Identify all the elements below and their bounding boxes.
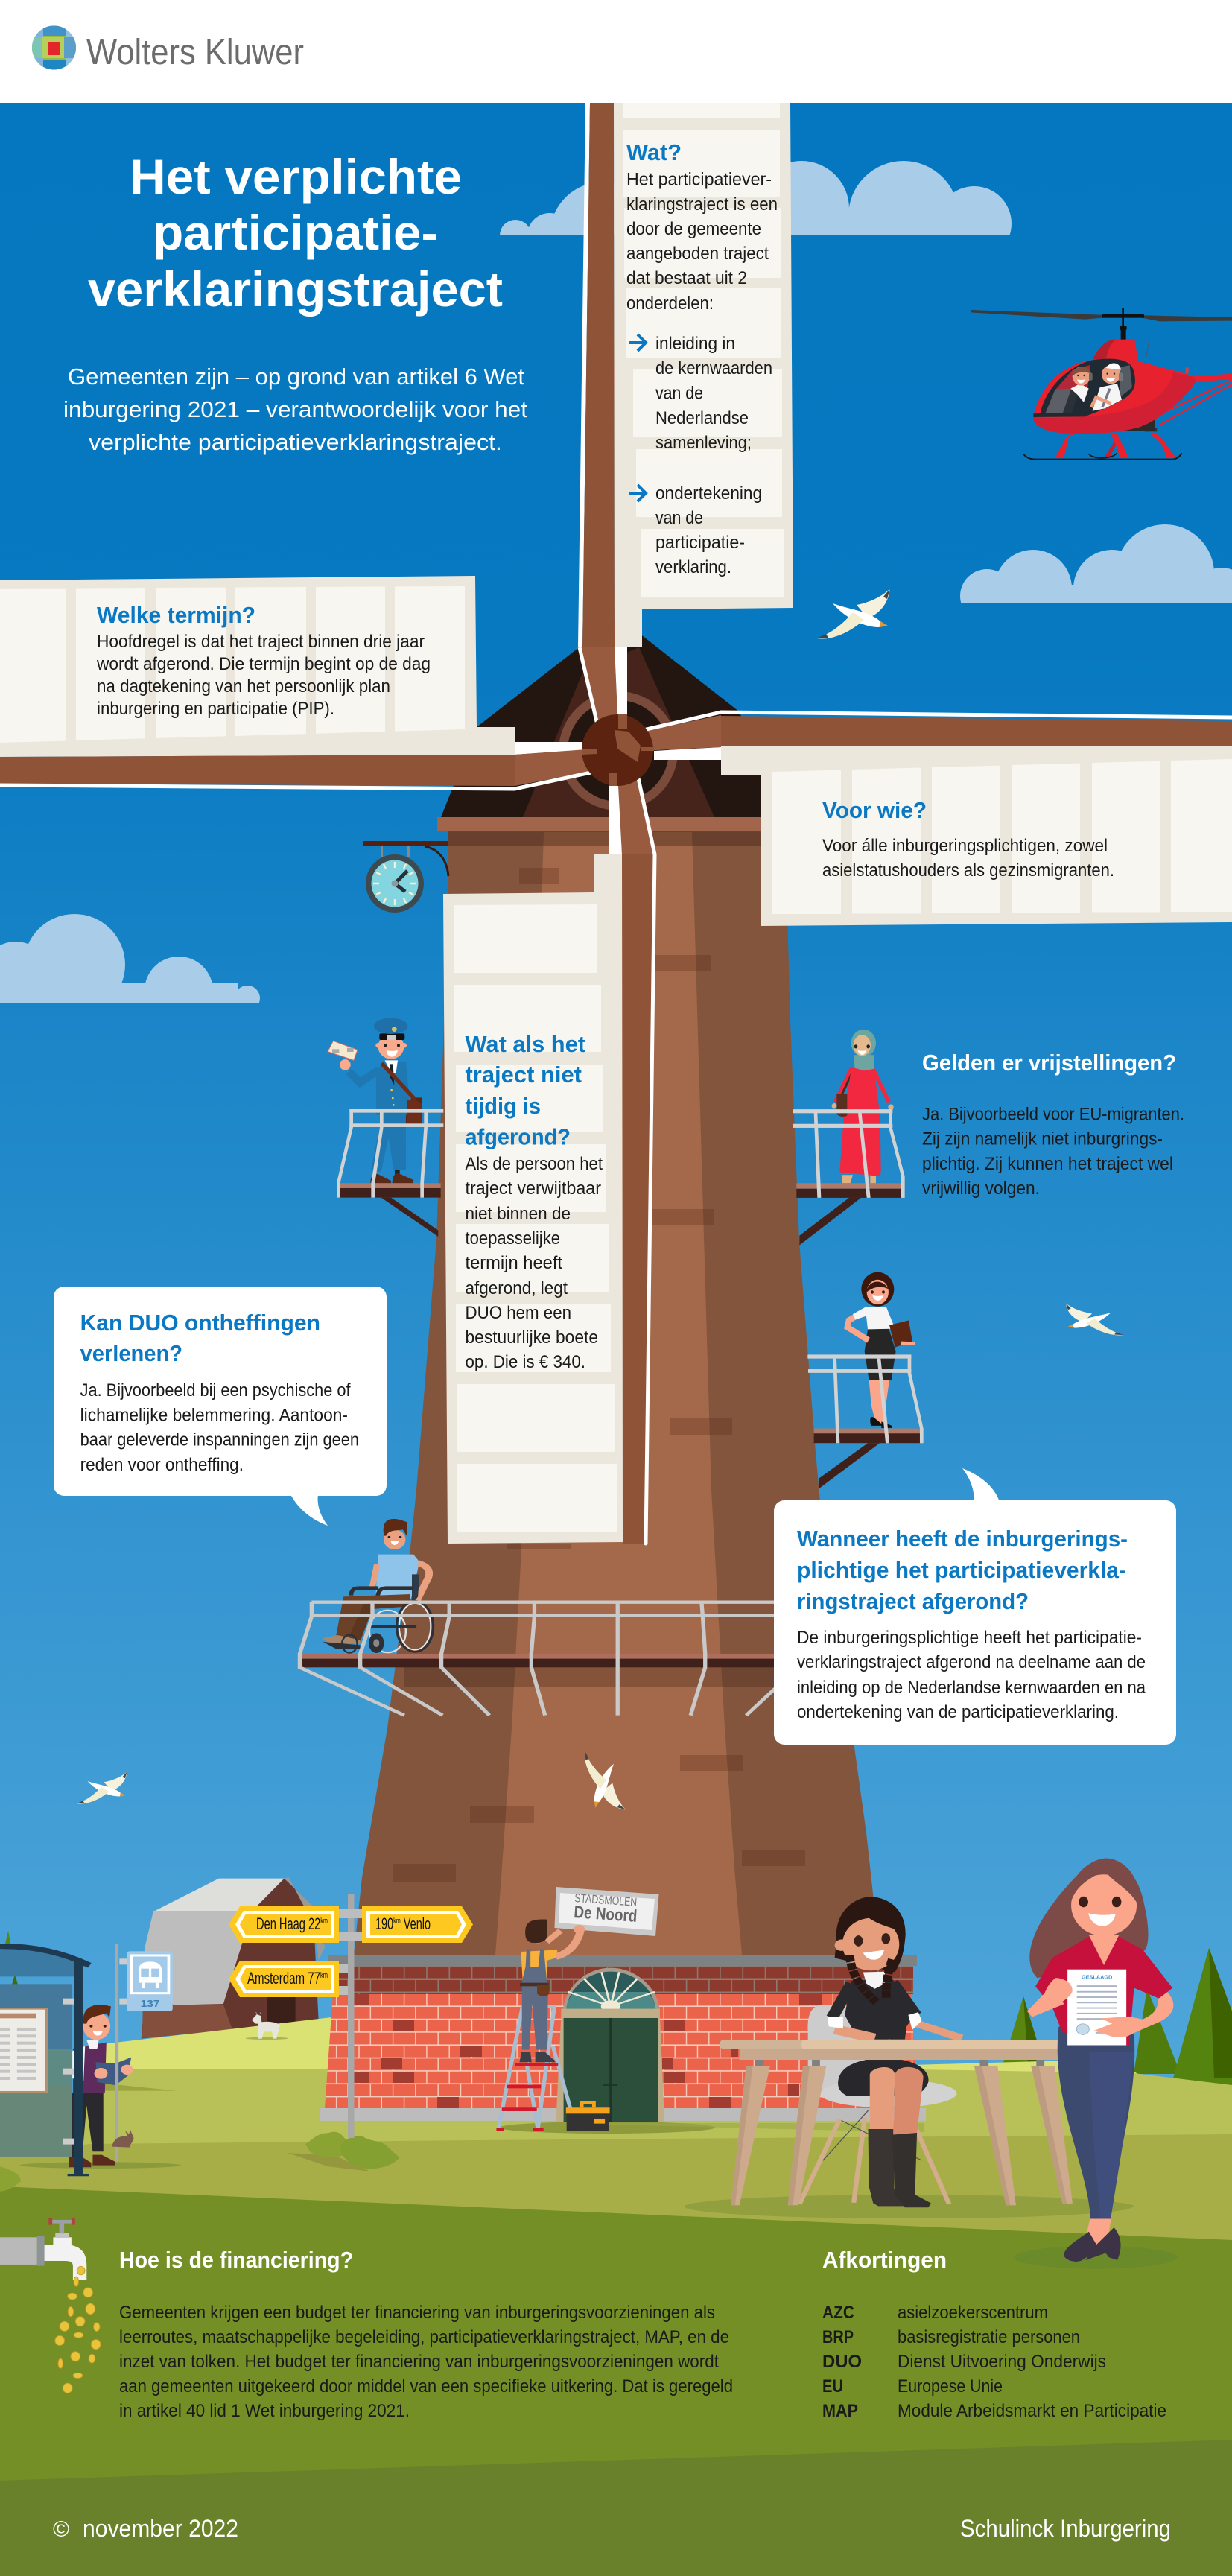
panel: Voor wie?: Voor wie?	[822, 797, 927, 823]
panel: Wat?: onderdelen:	[626, 294, 714, 314]
panel: Afkortingen: Afkortingen	[822, 2247, 947, 2273]
balcony with postman	[328, 1018, 443, 1237]
panel: Wat als het traject niet tijdig is afgerond?: DUO hem een	[465, 1303, 571, 1323]
callout: Wanneer heeft de inburgeringsplichtige: De inburgeringsplichtige heeft het participatie-	[797, 1628, 1142, 1648]
panel: Wat?: door de gemeente	[626, 219, 761, 239]
panel: Wat?: dat bestaat uit 2	[626, 268, 747, 288]
panel: Wat als het traject niet tijdig is afgerond?	[465, 1031, 603, 1372]
callout: Wanneer heeft de inburgeringsplichtige: ondertekening van de participatieverklaring.	[797, 1702, 1119, 1722]
panel: Wat?: Wat?	[626, 139, 682, 165]
panel: Afkortingen: EU	[822, 2376, 843, 2396]
panel: Wat als het traject niet tijdig is afgerond?: traject verwijtbaar	[465, 1178, 601, 1199]
panel: Wat?: ondertekening	[655, 483, 762, 504]
signpost: Den Haag, Venlo, Amsterdam: 190	[375, 1914, 403, 1933]
panel: Voor wie?: asielstatushouders als gezinsmigranten.	[822, 860, 1114, 881]
panel: Wat?: de kernwaarden	[655, 358, 772, 378]
footer: date: ©	[53, 2517, 69, 2542]
callout: Wanneer heeft de inburgeringsplichtige: inleiding op de Nederlandse kernwaarden en na	[797, 1678, 1146, 1698]
ground: hill and fields	[0, 2017, 1232, 2576]
windmill hub	[582, 714, 654, 786]
pine tree left	[0, 1931, 30, 2026]
bush	[288, 2132, 400, 2171]
callout: Wanneer heeft de inburgeringsplichtige: plichtige het participatieverkla-	[797, 1557, 1126, 1583]
panel: Hoe is de financiering?: inzet van tolken. Het budget ter financiering van inburgeringsvoorzieningen wordt	[119, 2352, 719, 2372]
panel: Wat als het traject niet tijdig is afgerond?: niet binnen de	[465, 1204, 571, 1224]
intro text	[63, 364, 527, 455]
intro text: inburgering 2021 – verantwoordelijk voor het	[63, 396, 527, 422]
callout: Kan DUO ontheffingen verlenen?: lichamelijke belemmering. Aantoon-	[80, 1406, 348, 1426]
panel: Wat als het traject niet tijdig is afgerond?: toepasselijke	[465, 1228, 560, 1249]
panel: Hoe is de financiering?: in artikel 40 lid 1 Wet inburgering 2021.	[119, 2401, 410, 2421]
sign: Stadsmolen De Noord	[554, 1887, 658, 1936]
balcony with businesswoman	[807, 1272, 924, 1488]
balcony with woman in red dress	[793, 1030, 905, 1246]
faucet	[0, 2218, 86, 2280]
callout: Wanneer heeft de inburgeringsplichtige	[774, 1468, 1176, 1745]
signpost: Den Haag, Venlo, Amsterdam: km	[320, 1971, 328, 1980]
panel: Wat?	[626, 139, 778, 577]
panel: Wat als het traject niet tijdig is afgerond?: termijn heeft	[465, 1253, 562, 1273]
sign: Stadsmolen De Noord: De Noord	[574, 1902, 638, 1926]
wide balcony with wheelchair user	[299, 1519, 784, 1716]
panel: Afkortingen: basisregistratie personen	[898, 2327, 1080, 2347]
cloud right	[960, 524, 1232, 603]
signpost: Den Haag, Venlo, Amsterdam	[229, 1894, 473, 2138]
callout: Kan DUO ontheffingen verlenen?: Ja. Bijvoorbeeld bij een psychische of	[80, 1380, 351, 1400]
pine trees right	[1003, 1948, 1232, 2086]
panel: Wat?: van de	[655, 508, 703, 528]
panel: Welke termijn?: wordt afgerond. Die termijn begint op de dag	[96, 654, 431, 674]
panel: Afkortingen: AZC	[822, 2303, 854, 2323]
table and chair with seated woman	[685, 1897, 1132, 2218]
title: participatie-	[153, 205, 438, 260]
signpost: Den Haag, Venlo, Amsterdam: Den Haag 22	[256, 1914, 353, 1933]
callout: Kan DUO ontheffingen verlenen?: reden voor ontheffing.	[80, 1455, 244, 1475]
bus stop sign: 137	[141, 1998, 160, 2009]
callout: Kan DUO ontheffingen verlenen?	[54, 1287, 387, 1526]
standing woman with certificate	[1014, 1858, 1178, 2269]
panel: Wat als het traject niet tijdig is afgerond?: afgerond, legt	[465, 1278, 568, 1298]
panel: Wat?: participatie-	[655, 533, 745, 553]
barn	[142, 1877, 326, 2039]
callout: Wanneer heeft de inburgeringsplichtige: Wanneer heeft de inburgerings-	[797, 1526, 1128, 1552]
helicopter	[971, 308, 1232, 460]
panel: Wat?: verklaring.	[655, 557, 731, 577]
windmill tower	[354, 817, 880, 1955]
panel: Welke termijn?: Hoofdregel is dat het traject binnen drie jaar	[97, 632, 425, 652]
panel: Wat als het traject niet tijdig is afgerond?: Wat als het	[465, 1031, 585, 1057]
goat	[246, 2012, 288, 2040]
panel: Afkortingen: Module Arbeidsmarkt en Participatie	[898, 2401, 1166, 2421]
worker on ladder	[496, 1919, 585, 2131]
bus stop shelter and man reading	[0, 1947, 181, 2192]
callout: Kan DUO ontheffingen verlenen?: Kan DUO ontheffingen	[80, 1310, 320, 1336]
door with arched window	[556, 1968, 664, 2122]
seagull 1	[817, 589, 890, 639]
panel: Voor wie?	[822, 797, 1114, 881]
cloud top	[500, 161, 1012, 235]
title: verklaringstraject	[88, 261, 503, 317]
signpost: Den Haag, Venlo, Amsterdam: km	[393, 1917, 401, 1926]
panel: Hoe is de financiering?: Hoe is de financiering?	[119, 2247, 353, 2273]
panel: Wat?: samenleving;	[655, 433, 752, 453]
cloud left	[0, 914, 260, 1003]
title	[88, 149, 503, 317]
panel: Gelden er vrijstellingen?: Zij zijn namelijk niet inburgrings-	[922, 1129, 1163, 1149]
panel: Gelden er vrijstellingen?: vrijwillig volgen.	[922, 1178, 1040, 1199]
panel: Wat als het traject niet tijdig is afgerond?: tijdig is	[465, 1093, 541, 1119]
callout: Kan DUO ontheffingen verlenen?: baar geleverde inspanningen zijn geen	[80, 1430, 359, 1450]
panel: Wat?: aangeboden traject	[626, 244, 769, 264]
panel: Afkortingen: asielzoekerscentrum	[898, 2303, 1048, 2323]
panel: Hoe is de financiering?	[119, 2247, 733, 2421]
panel: Afkortingen: Europese Unie	[898, 2376, 1003, 2396]
window sail: left	[0, 576, 605, 789]
seagull 2	[1066, 1303, 1123, 1335]
header bar	[0, 0, 1232, 103]
panel: Gelden er vrijstellingen?	[922, 1050, 1184, 1199]
panel: Wat?: klaringstraject is een	[626, 194, 778, 215]
standing woman with certificate: GESLAAGD	[1082, 1973, 1112, 1981]
panel: Welke termijn?	[96, 602, 431, 719]
panel: Wat als het traject niet tijdig is afgerond?: afgerond?	[465, 1123, 571, 1150]
panel: Wat?: Nederlandse	[655, 408, 749, 428]
panel: Afkortingen: DUO	[822, 2352, 862, 2372]
callout: Wanneer heeft de inburgeringsplichtige: verklaringstraject afgerond na deelname aan de	[797, 1652, 1146, 1672]
window sail: right	[630, 712, 1232, 926]
panel: Afkortingen: Dienst Uitvoering Onderwijs	[898, 2352, 1106, 2372]
callout: Kan DUO ontheffingen verlenen?: verlenen?	[80, 1340, 182, 1366]
callout: Wanneer heeft de inburgeringsplichtige: ringstraject afgerond?	[797, 1588, 1029, 1614]
seagull 3	[77, 1771, 127, 1803]
panel: Wat als het traject niet tijdig is afgerond?: bestuurlijke boete	[465, 1327, 598, 1348]
brick building	[320, 1955, 926, 2134]
window sail: bottom	[443, 764, 655, 1544]
panel: Afkortingen	[822, 2247, 1166, 2421]
logo: Wolters Kluwer: Wolters Kluwer	[86, 33, 304, 72]
signpost: Den Haag, Venlo, Amsterdam: Amsterdam 77	[247, 1969, 354, 1987]
panel: Hoe is de financiering?: Gemeenten krijgen een budget ter financiering van inburgeringsvoorzieningen als	[119, 2303, 715, 2323]
footer: date: november 2022	[83, 2515, 238, 2542]
panel: Welke termijn?: inburgering en participatie (PIP).	[97, 699, 334, 719]
windmill cap	[441, 617, 790, 817]
intro text: Gemeenten zijn – op grond van artikel 6 Wet	[68, 364, 524, 390]
panel: Wat als het traject niet tijdig is afgerond?: Als de persoon het	[465, 1154, 603, 1174]
rabbit	[112, 2129, 134, 2148]
bus stop sign	[115, 1944, 173, 2162]
panel: Gelden er vrijstellingen?: Ja. Bijvoorbeeld voor EU-migranten.	[922, 1104, 1184, 1125]
footer: publisher: Schulinck Inburgering	[960, 2515, 1171, 2542]
panel: Wat als het traject niet tijdig is afgerond?: traject niet	[465, 1062, 582, 1088]
intro text: verplichte participatieverklaringstraject.	[89, 429, 502, 455]
panel: Welke termijn?: na dagtekening van het persoonlijk plan	[97, 676, 390, 697]
sign: Stadsmolen De Noord: STADSMOLEN	[574, 1892, 638, 1909]
logo: Wolters Kluwer	[32, 25, 304, 72]
falling coins	[55, 2266, 101, 2393]
signpost: Den Haag, Venlo, Amsterdam: km	[320, 1917, 328, 1926]
title: Het verplichte	[130, 149, 462, 204]
seagull 4	[585, 1751, 626, 1809]
panel: Voor wie?: Voor álle inburgeringsplichtigen, zowel	[822, 836, 1108, 856]
panel: Gelden er vrijstellingen?: plichtig. Zij kunnen het traject wel	[922, 1154, 1173, 1174]
panel: Wat?: Het participatiever-	[626, 170, 772, 190]
panel: Wat?: inleiding in	[655, 334, 735, 354]
window sail: top	[578, 103, 793, 737]
panel: Afkortingen: MAP	[822, 2401, 858, 2421]
panel: Wat?: van de	[655, 383, 703, 404]
hanging clock	[363, 841, 448, 913]
signpost: Den Haag, Venlo, Amsterdam: Venlo	[401, 1914, 431, 1933]
panel: Afkortingen: BRP	[822, 2327, 854, 2347]
panel: Hoe is de financiering?: aan gemeenten uitgekeerd door middel van een specifieke uitkering. Dat is geregeld	[119, 2376, 733, 2396]
panel: Hoe is de financiering?: leerroutes, maatschappelijke begeleiding, participatieverklaringstraject, MAP, en de	[119, 2327, 729, 2347]
panel: Welke termijn?: Welke termijn?	[97, 602, 255, 628]
panel: Wat als het traject niet tijdig is afgerond?: op. Die is € 340.	[465, 1352, 585, 1372]
toolbox	[566, 2103, 610, 2131]
panel: Gelden er vrijstellingen?: Gelden er vrijstellingen?	[922, 1050, 1176, 1076]
